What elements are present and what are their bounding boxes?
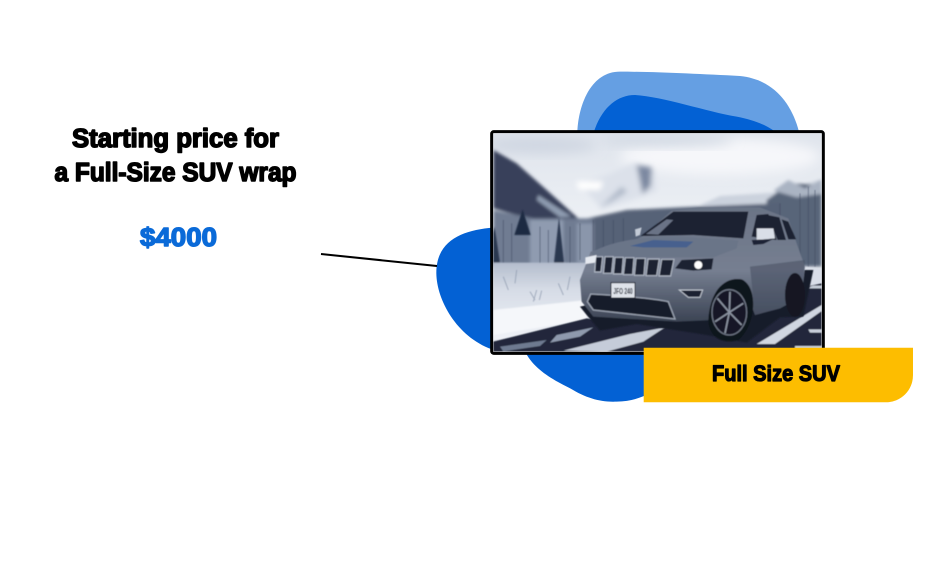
fog light: [679, 290, 703, 297]
SUV: JFO 240: [613, 286, 633, 296]
rear wheel: [785, 273, 805, 317]
side mirrors: [757, 228, 775, 240]
label tab: Full Size SUV: [644, 348, 913, 402]
SUV lower door shade: [750, 260, 805, 300]
photo frame: [492, 132, 823, 353]
SUV side windows: [752, 214, 777, 240]
price value: $4000: [140, 222, 217, 252]
headlights: [675, 258, 713, 271]
SUV body: [580, 207, 805, 322]
background blob: light blue: [577, 72, 799, 132]
SUV windshield: [641, 212, 748, 238]
licence plate: [611, 283, 635, 298]
photo: tree trunks: [502, 186, 816, 267]
photo: snowy shrubs: [503, 270, 570, 302]
background blob: dark blue lower: [436, 228, 653, 402]
heading: starting price: a Full-Size SUV wrap: [54, 159, 296, 187]
grille: [595, 257, 674, 276]
lower bumper: [587, 294, 675, 319]
SUV hood: [592, 239, 726, 257]
label tab: Full Size SUV: Full Size SUV: [712, 361, 840, 386]
connector line: [321, 254, 437, 266]
photo: snowy peak: [577, 163, 657, 209]
heading: starting price: [54, 125, 296, 187]
SUV shadow and tyres: [580, 270, 813, 343]
heading: starting price: Starting price for: [72, 125, 279, 153]
front wheel: [708, 279, 753, 341]
photo: SUV in snowy mountains: [483, 132, 823, 353]
background blob: dark blue top: [594, 95, 775, 132]
SUV: [580, 207, 813, 343]
